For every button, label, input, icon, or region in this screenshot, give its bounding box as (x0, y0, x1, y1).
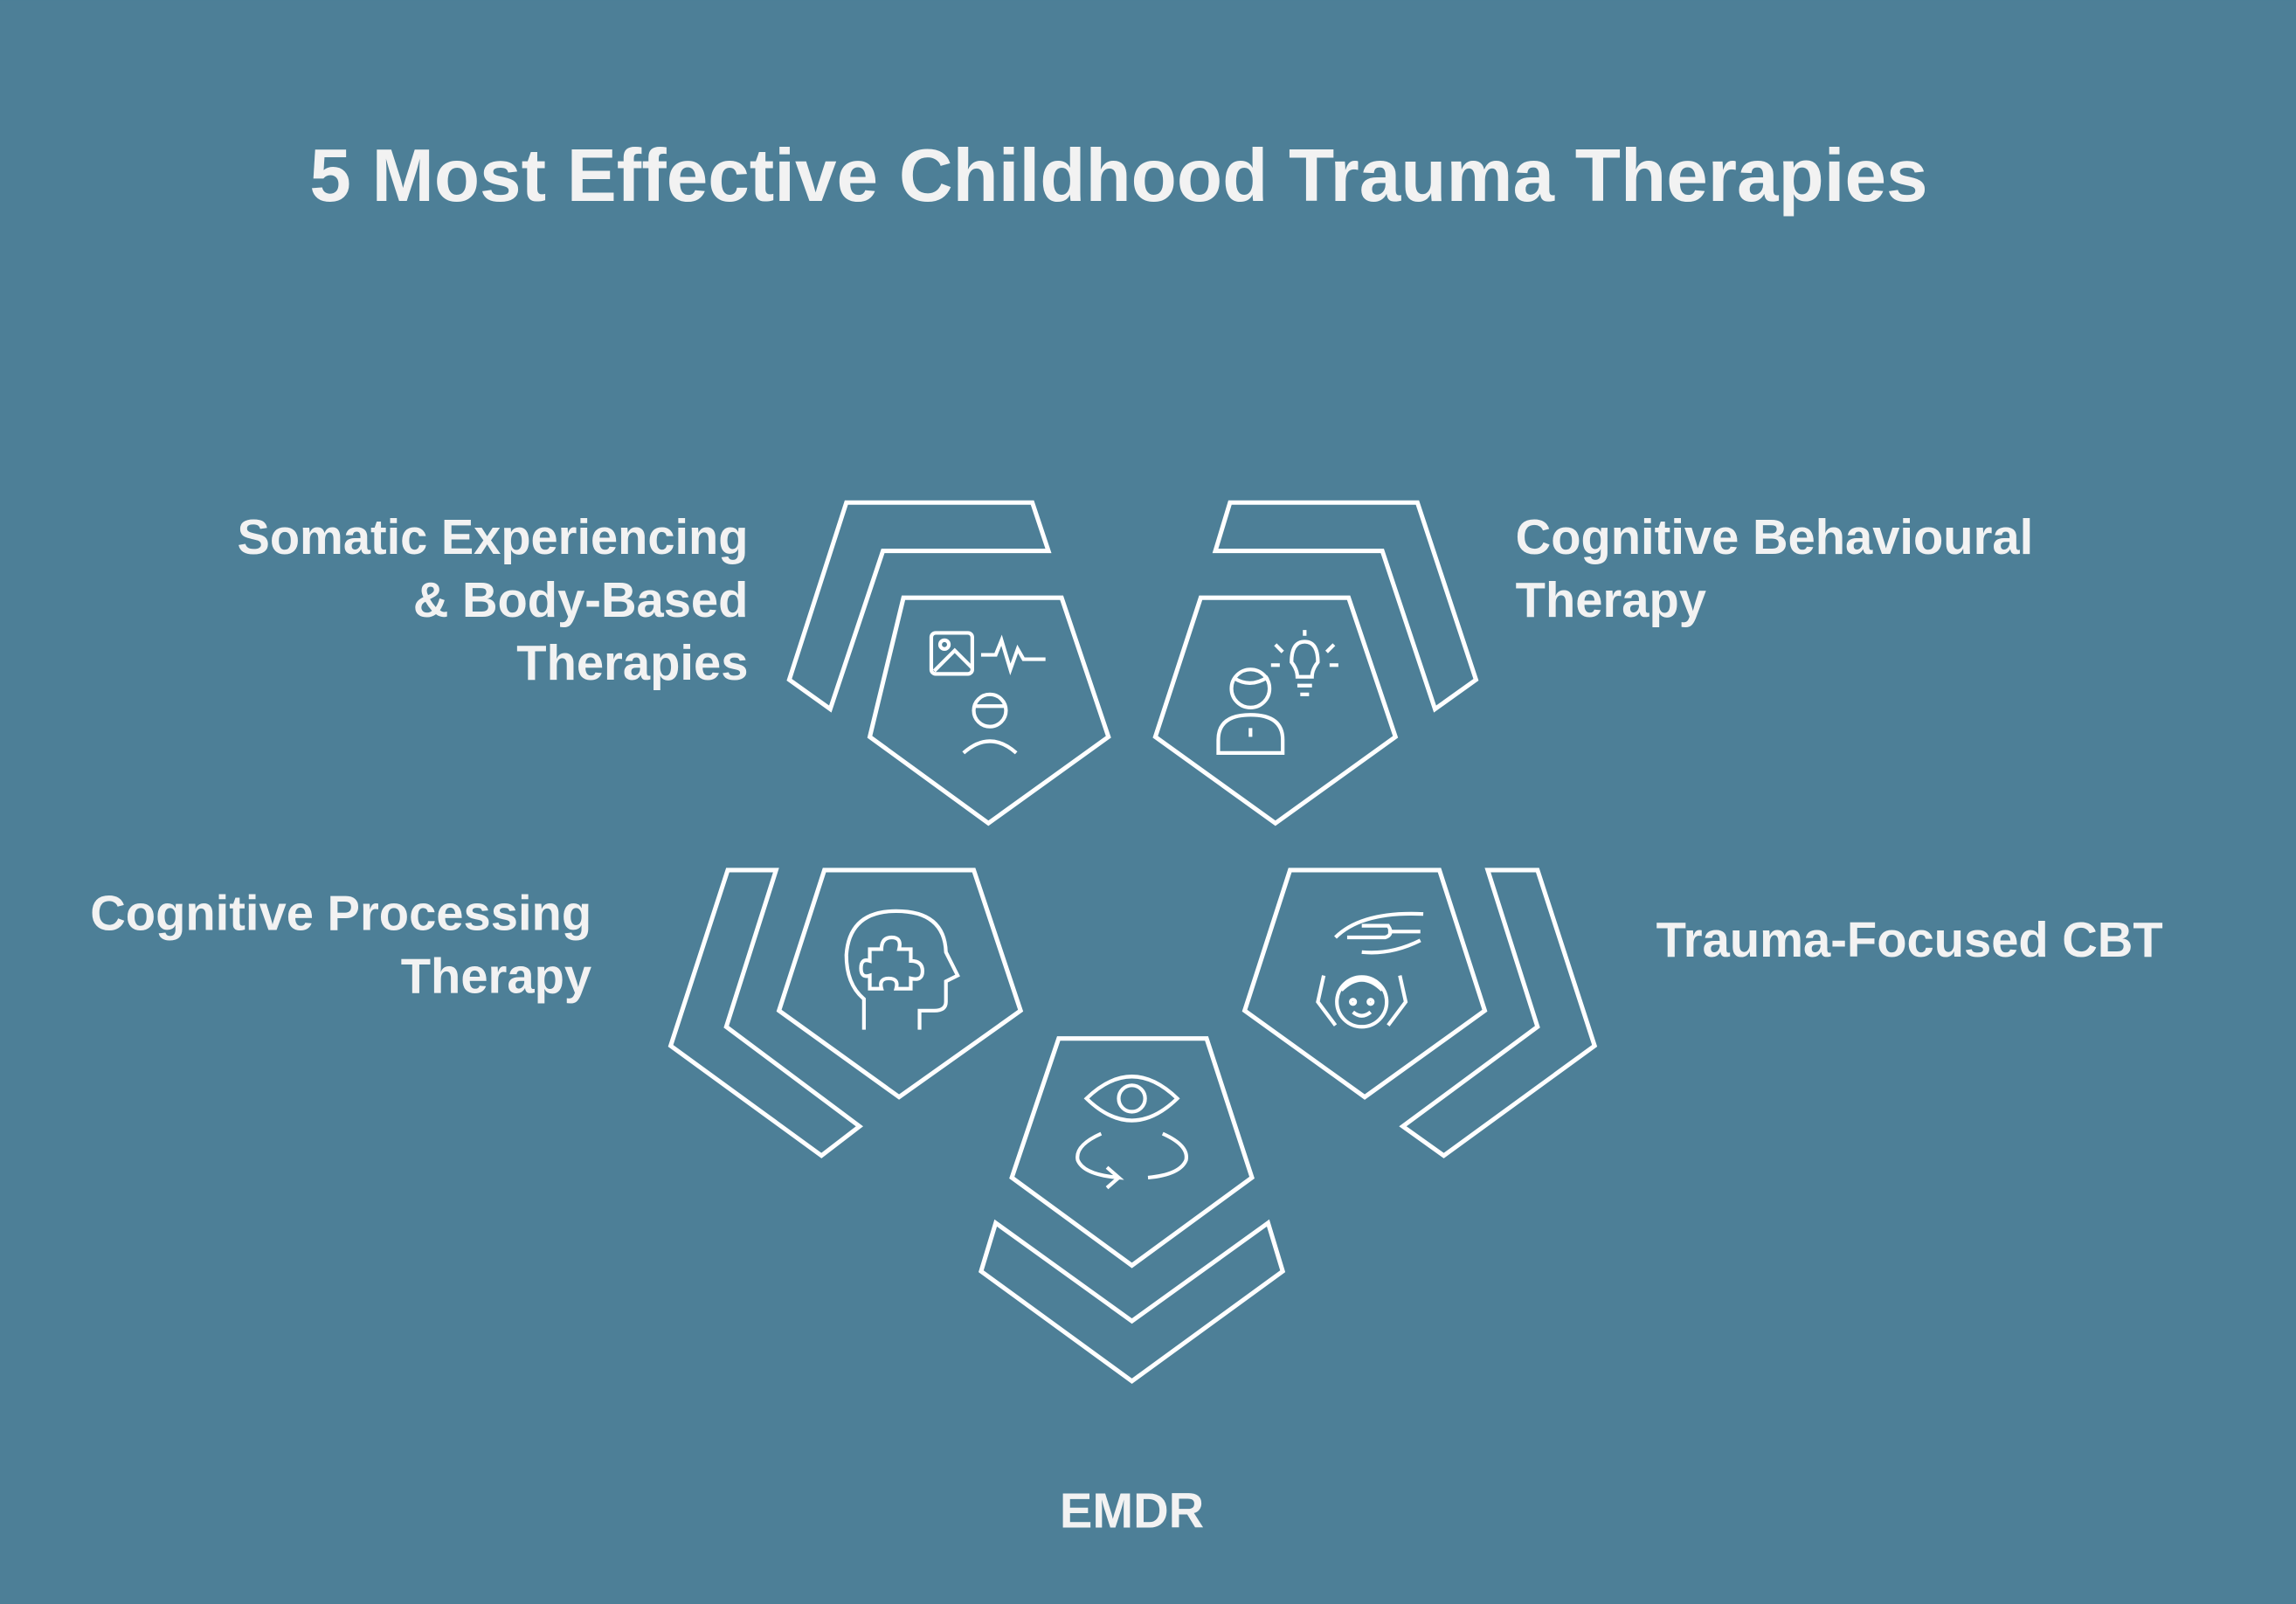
label: EMDR: EMDR (1060, 1483, 1204, 1538)
icon: person with lightbulb (1218, 630, 1338, 753)
label: CBT: Cognitive Behavioural (1516, 509, 2033, 564)
segment: somatic (789, 502, 1109, 823)
icon: eye with rotation (1077, 1076, 1186, 1188)
icon: hand over child (1317, 914, 1423, 1027)
label: CPT: Therapy (401, 949, 591, 1004)
title: 5 Most Effective Childhood Trauma Therapies (309, 135, 1928, 218)
icon: head with puzzle (847, 911, 958, 1030)
label: CPT: Cognitive Processing (90, 886, 591, 941)
label: somatic: & Body-Based (413, 572, 748, 627)
label: somatic: Therapies (516, 635, 748, 690)
label: CBT: Therapy (1516, 572, 1706, 627)
segment: CPT (671, 870, 1020, 1156)
label: TF-CBT: Trauma-Focused CBT (1656, 912, 2163, 967)
segment: CBT (1155, 502, 1476, 823)
segment: TF-CBT (1245, 870, 1594, 1156)
segment: EMDR (981, 1039, 1283, 1381)
label: somatic: Somatic Experiencing (238, 509, 748, 564)
icon: image, pulse, person (931, 633, 1046, 753)
